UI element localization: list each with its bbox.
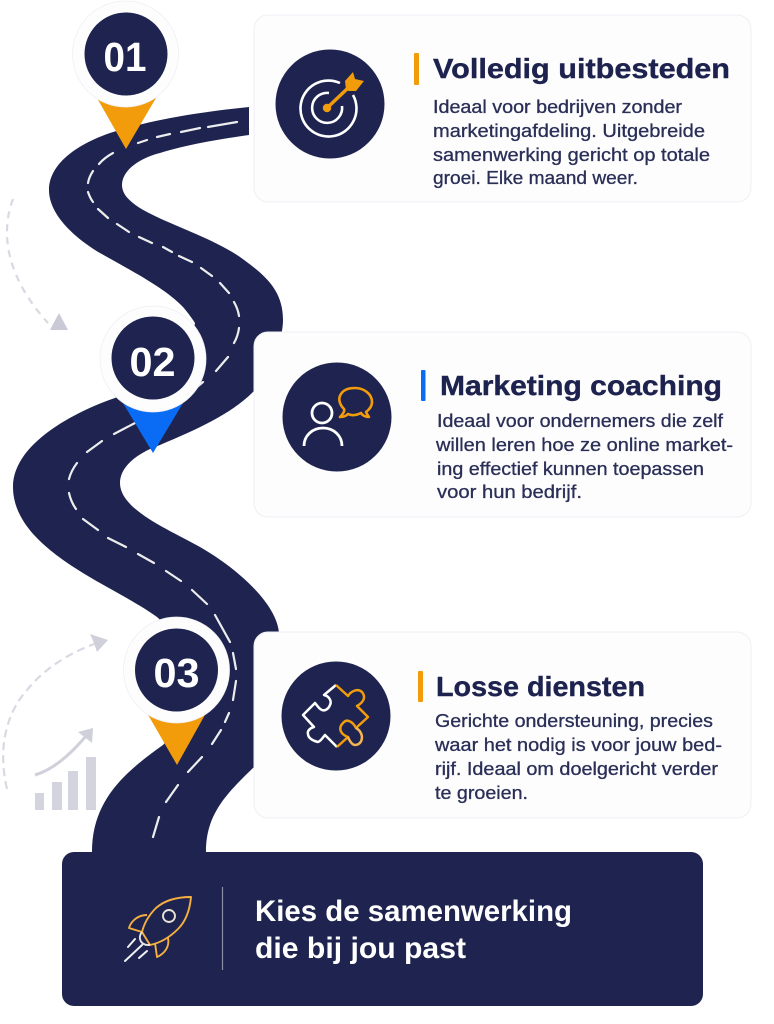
road bbox=[13, 107, 290, 852]
text block: rijf. Ideaal om doelgericht verder bbox=[435, 759, 718, 779]
arrow: lower grey dashed arc arrow bbox=[3, 634, 108, 789]
arrow: upper grey dashed arrow bbox=[7, 199, 68, 330]
text block: willen leren hoe ze online market- bbox=[435, 435, 733, 455]
text block: waar het nodig is voor jouw bed- bbox=[434, 735, 722, 755]
text block: ing effectief kunnen toepassen bbox=[437, 459, 704, 479]
heading accent bar bbox=[418, 671, 423, 702]
call to action text: Kies de samenwerking bbox=[255, 895, 572, 928]
pin 03 bbox=[124, 617, 230, 765]
heading: Marketing coaching bbox=[440, 370, 722, 401]
icon: rocket bbox=[125, 897, 191, 961]
heading: Losse diensten bbox=[436, 671, 645, 702]
divider bbox=[222, 887, 224, 970]
text block: groei. Elke maand weer. bbox=[433, 168, 638, 188]
icon: target with arrow bbox=[276, 50, 384, 158]
text block: Ideaal voor ondernemers die zelf bbox=[437, 411, 724, 431]
icon: person with speech bubble bbox=[282, 362, 392, 472]
heading accent bar bbox=[421, 370, 426, 401]
text block: marketingafdeling. Uitgebreide bbox=[433, 121, 705, 141]
panel: marketing coaching bbox=[254, 332, 751, 517]
text block bbox=[434, 711, 722, 803]
pin 02 bbox=[100, 306, 206, 453]
heading: Volledig uitbesteden bbox=[433, 53, 730, 84]
heading accent bar bbox=[414, 53, 419, 85]
panel: losse diensten bbox=[254, 632, 751, 818]
pin 03: 03 bbox=[154, 650, 200, 696]
panel: call to action bar bbox=[62, 852, 703, 1006]
icon: puzzle piece bbox=[282, 662, 390, 770]
call to action text bbox=[255, 895, 572, 965]
text block bbox=[433, 97, 710, 188]
pin 01 bbox=[72, 1, 178, 149]
pin 02: 02 bbox=[130, 339, 176, 385]
text block: Gerichte ondersteuning, precies bbox=[435, 711, 713, 731]
text block bbox=[435, 411, 733, 502]
road centre dashes bbox=[69, 122, 239, 837]
text block: voor hun bedrijf. bbox=[437, 482, 582, 502]
text block: samenwerking gericht op totale bbox=[433, 145, 710, 165]
pin 01: 01 bbox=[104, 34, 146, 80]
chart: grey rising bars with arrow bbox=[35, 728, 96, 810]
panel: volledig uitbesteden bbox=[254, 15, 751, 202]
call to action text: die bij jou past bbox=[255, 932, 466, 965]
text block: te groeien. bbox=[435, 783, 528, 803]
text block: Ideaal voor bedrijven zonder bbox=[433, 97, 682, 117]
